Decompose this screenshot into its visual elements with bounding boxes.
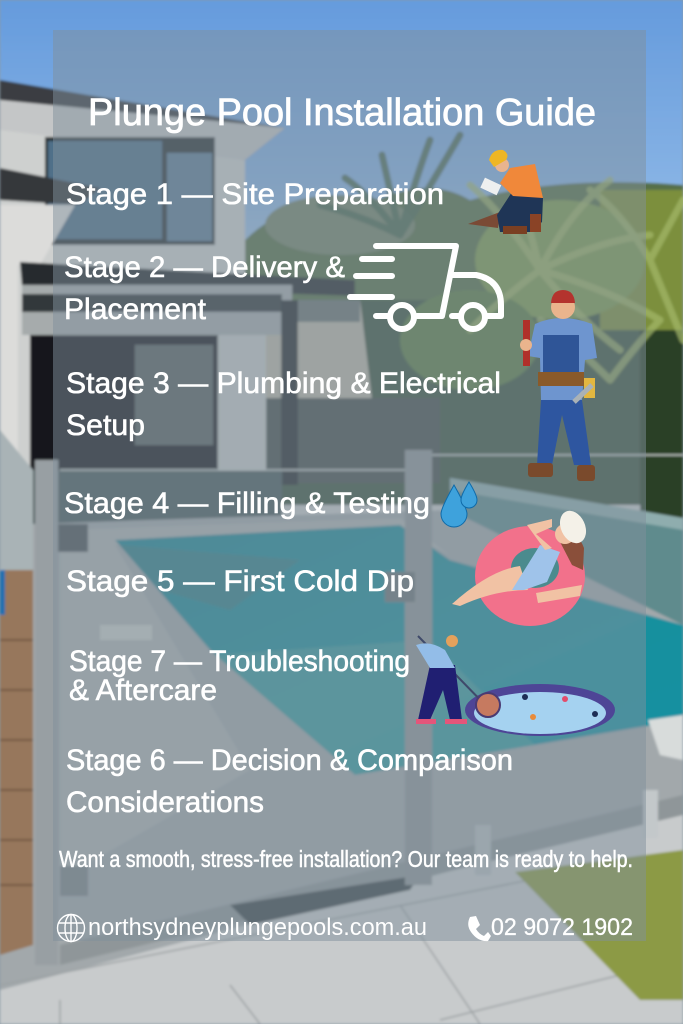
stage 1 heading: Stage 1 — Site Preparation [66, 178, 444, 211]
stage 2 heading: Placement [64, 293, 207, 326]
trees and hedge [245, 135, 683, 520]
icon: globe [58, 914, 84, 942]
stage 4 heading: Stage 4 — Filling & Testing [64, 487, 430, 520]
icon: pool cleaner with net [416, 635, 615, 736]
icon: surveyor worker [468, 150, 543, 234]
retaining wall [450, 478, 683, 635]
stage 6 heading: Stage 6 — Decision & Comparison [66, 744, 513, 777]
translucent overlay panel [53, 30, 646, 941]
stage 6 heading [66, 744, 513, 819]
timber deck [0, 570, 33, 955]
stage 3 heading: Setup [66, 409, 145, 442]
stage 3 heading: Stage 3 — Plumbing & Electrical [66, 367, 501, 400]
stage 2 heading [64, 251, 345, 326]
stage 6 heading: Considerations [66, 786, 264, 819]
glass fence posts and fittings [35, 450, 683, 965]
pool water [115, 525, 683, 775]
stage 2 heading: Stage 2 — Delivery & [64, 251, 345, 284]
foreground paving [0, 810, 683, 1024]
icon: water drops [441, 482, 477, 527]
icon: woman in float ring [452, 507, 591, 626]
title: Plunge Pool Installation Guide [88, 92, 596, 134]
stage 7 heading: & Aftercare [69, 674, 217, 707]
stage 3 heading [66, 367, 501, 442]
house [0, 80, 355, 525]
website: northsydneyplungepools.com.au [88, 914, 427, 941]
neighbouring house and fence [265, 300, 372, 410]
icon: phone [468, 916, 491, 941]
icon: plumber [520, 290, 597, 481]
stage 7 heading: Stage 7 — Troubleshooting [69, 645, 410, 678]
phone number: 02 9072 1902 [491, 914, 633, 941]
stage 5 heading: Stage 5 — First Cold Dip [66, 565, 414, 598]
lawn [515, 850, 683, 1000]
icon: delivery truck [350, 246, 501, 329]
pool terrace and paving [0, 510, 683, 1000]
stage 7 heading [69, 645, 410, 707]
